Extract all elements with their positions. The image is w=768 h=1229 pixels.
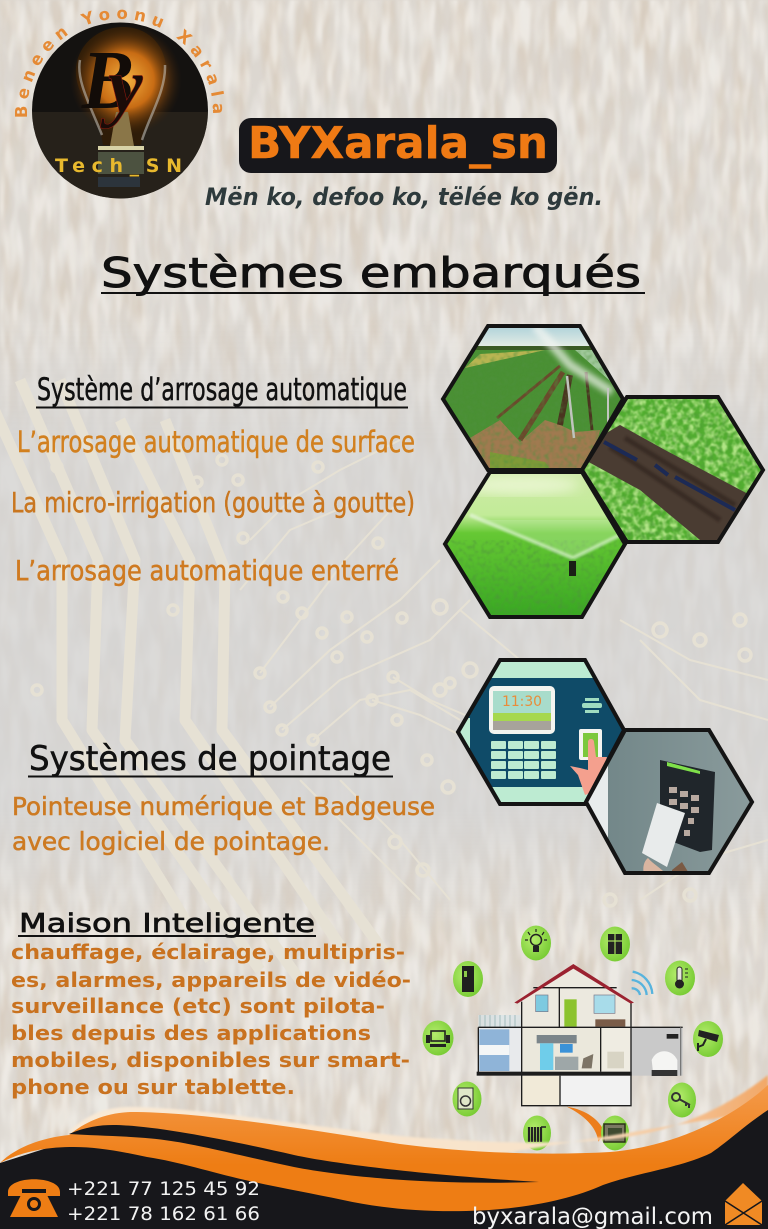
hexagon: drip irrigation photo <box>580 395 765 545</box>
smart home description <box>11 940 411 1099</box>
time clock description line two: avec logiciel de pointage. <box>12 827 330 856</box>
time clock hexagons <box>455 658 754 878</box>
icon: radiator <box>523 1116 551 1150</box>
smart home description: chauffage, éclairage, multipris- <box>11 940 405 964</box>
phone number one: +221 77 125 45 92 <box>67 1178 260 1200</box>
heading: irrigation: Système d’arrosage automatique <box>37 372 407 408</box>
icon: thermometer <box>665 960 695 996</box>
logo disc with light bulb <box>30 20 210 202</box>
phone number two: +221 78 162 61 66 <box>67 1203 260 1225</box>
section: time clock text <box>12 739 435 856</box>
irrigation photo hexagons <box>440 324 765 620</box>
smart home device icons <box>422 926 723 1150</box>
irrigation item three: L’arrosage automatique enterré <box>15 554 399 587</box>
icon: key <box>668 1082 696 1118</box>
hexagon: fingerprint terminal <box>455 658 627 806</box>
hexagon: fingerprint terminal: 11:30 <box>502 694 542 710</box>
brand badge: BYXarala_sn <box>248 118 548 169</box>
icon: telephone <box>8 1179 60 1217</box>
logo monogram By: B <box>81 34 134 127</box>
section: smart home text <box>11 909 411 1099</box>
footer wave band <box>0 1075 768 1229</box>
smart home description: es, alarmes, appareils de vidéo- <box>11 968 411 992</box>
smart home description: bles depuis des applications <box>11 1021 371 1045</box>
logo <box>14 10 224 198</box>
hexagon: badge reader photo <box>584 728 754 878</box>
icon: television and speakers <box>422 1020 454 1056</box>
icon: refrigerator <box>453 961 483 997</box>
icon: fireplace <box>601 1116 629 1150</box>
logo arc slogan: Beneen Yoonu Xarala <box>14 10 224 117</box>
logo text Tech_SN: Tech_SN <box>55 155 182 177</box>
icon: light bulb <box>521 926 551 960</box>
icon: security camera <box>693 1021 723 1057</box>
smart home description: surveillance (etc) sont pilota- <box>11 994 385 1018</box>
tagline: Mën ko, defoo ko, tëlée ko gën. <box>205 183 603 211</box>
icon: window blinds <box>600 926 630 962</box>
hexagon: field sprinkler photo <box>440 324 626 472</box>
time clock description line one: Pointeuse numérique et Badgeuse <box>12 792 435 821</box>
irrigation item one: L’arrosage automatique de surface <box>17 425 415 459</box>
house cutaway illustration <box>477 964 683 1142</box>
main title: Systèmes embarqués <box>101 249 641 297</box>
section: irrigation text <box>11 372 415 587</box>
irrigation item two: La micro-irrigation (goutte à goutte) <box>11 486 415 519</box>
logo monogram By: y <box>100 42 143 129</box>
icon: washing machine <box>452 1082 482 1116</box>
heading: time clock: Systèmes de pointage <box>29 739 391 779</box>
hexagon: lawn sprinkler photo <box>443 470 627 620</box>
icon: envelope <box>725 1183 762 1225</box>
heading: smart home: Maison Inteligente <box>19 909 315 939</box>
smart home description: mobiles, disponibles sur smart- <box>11 1048 410 1072</box>
smart home description: phone ou sur tablette. <box>11 1075 295 1099</box>
